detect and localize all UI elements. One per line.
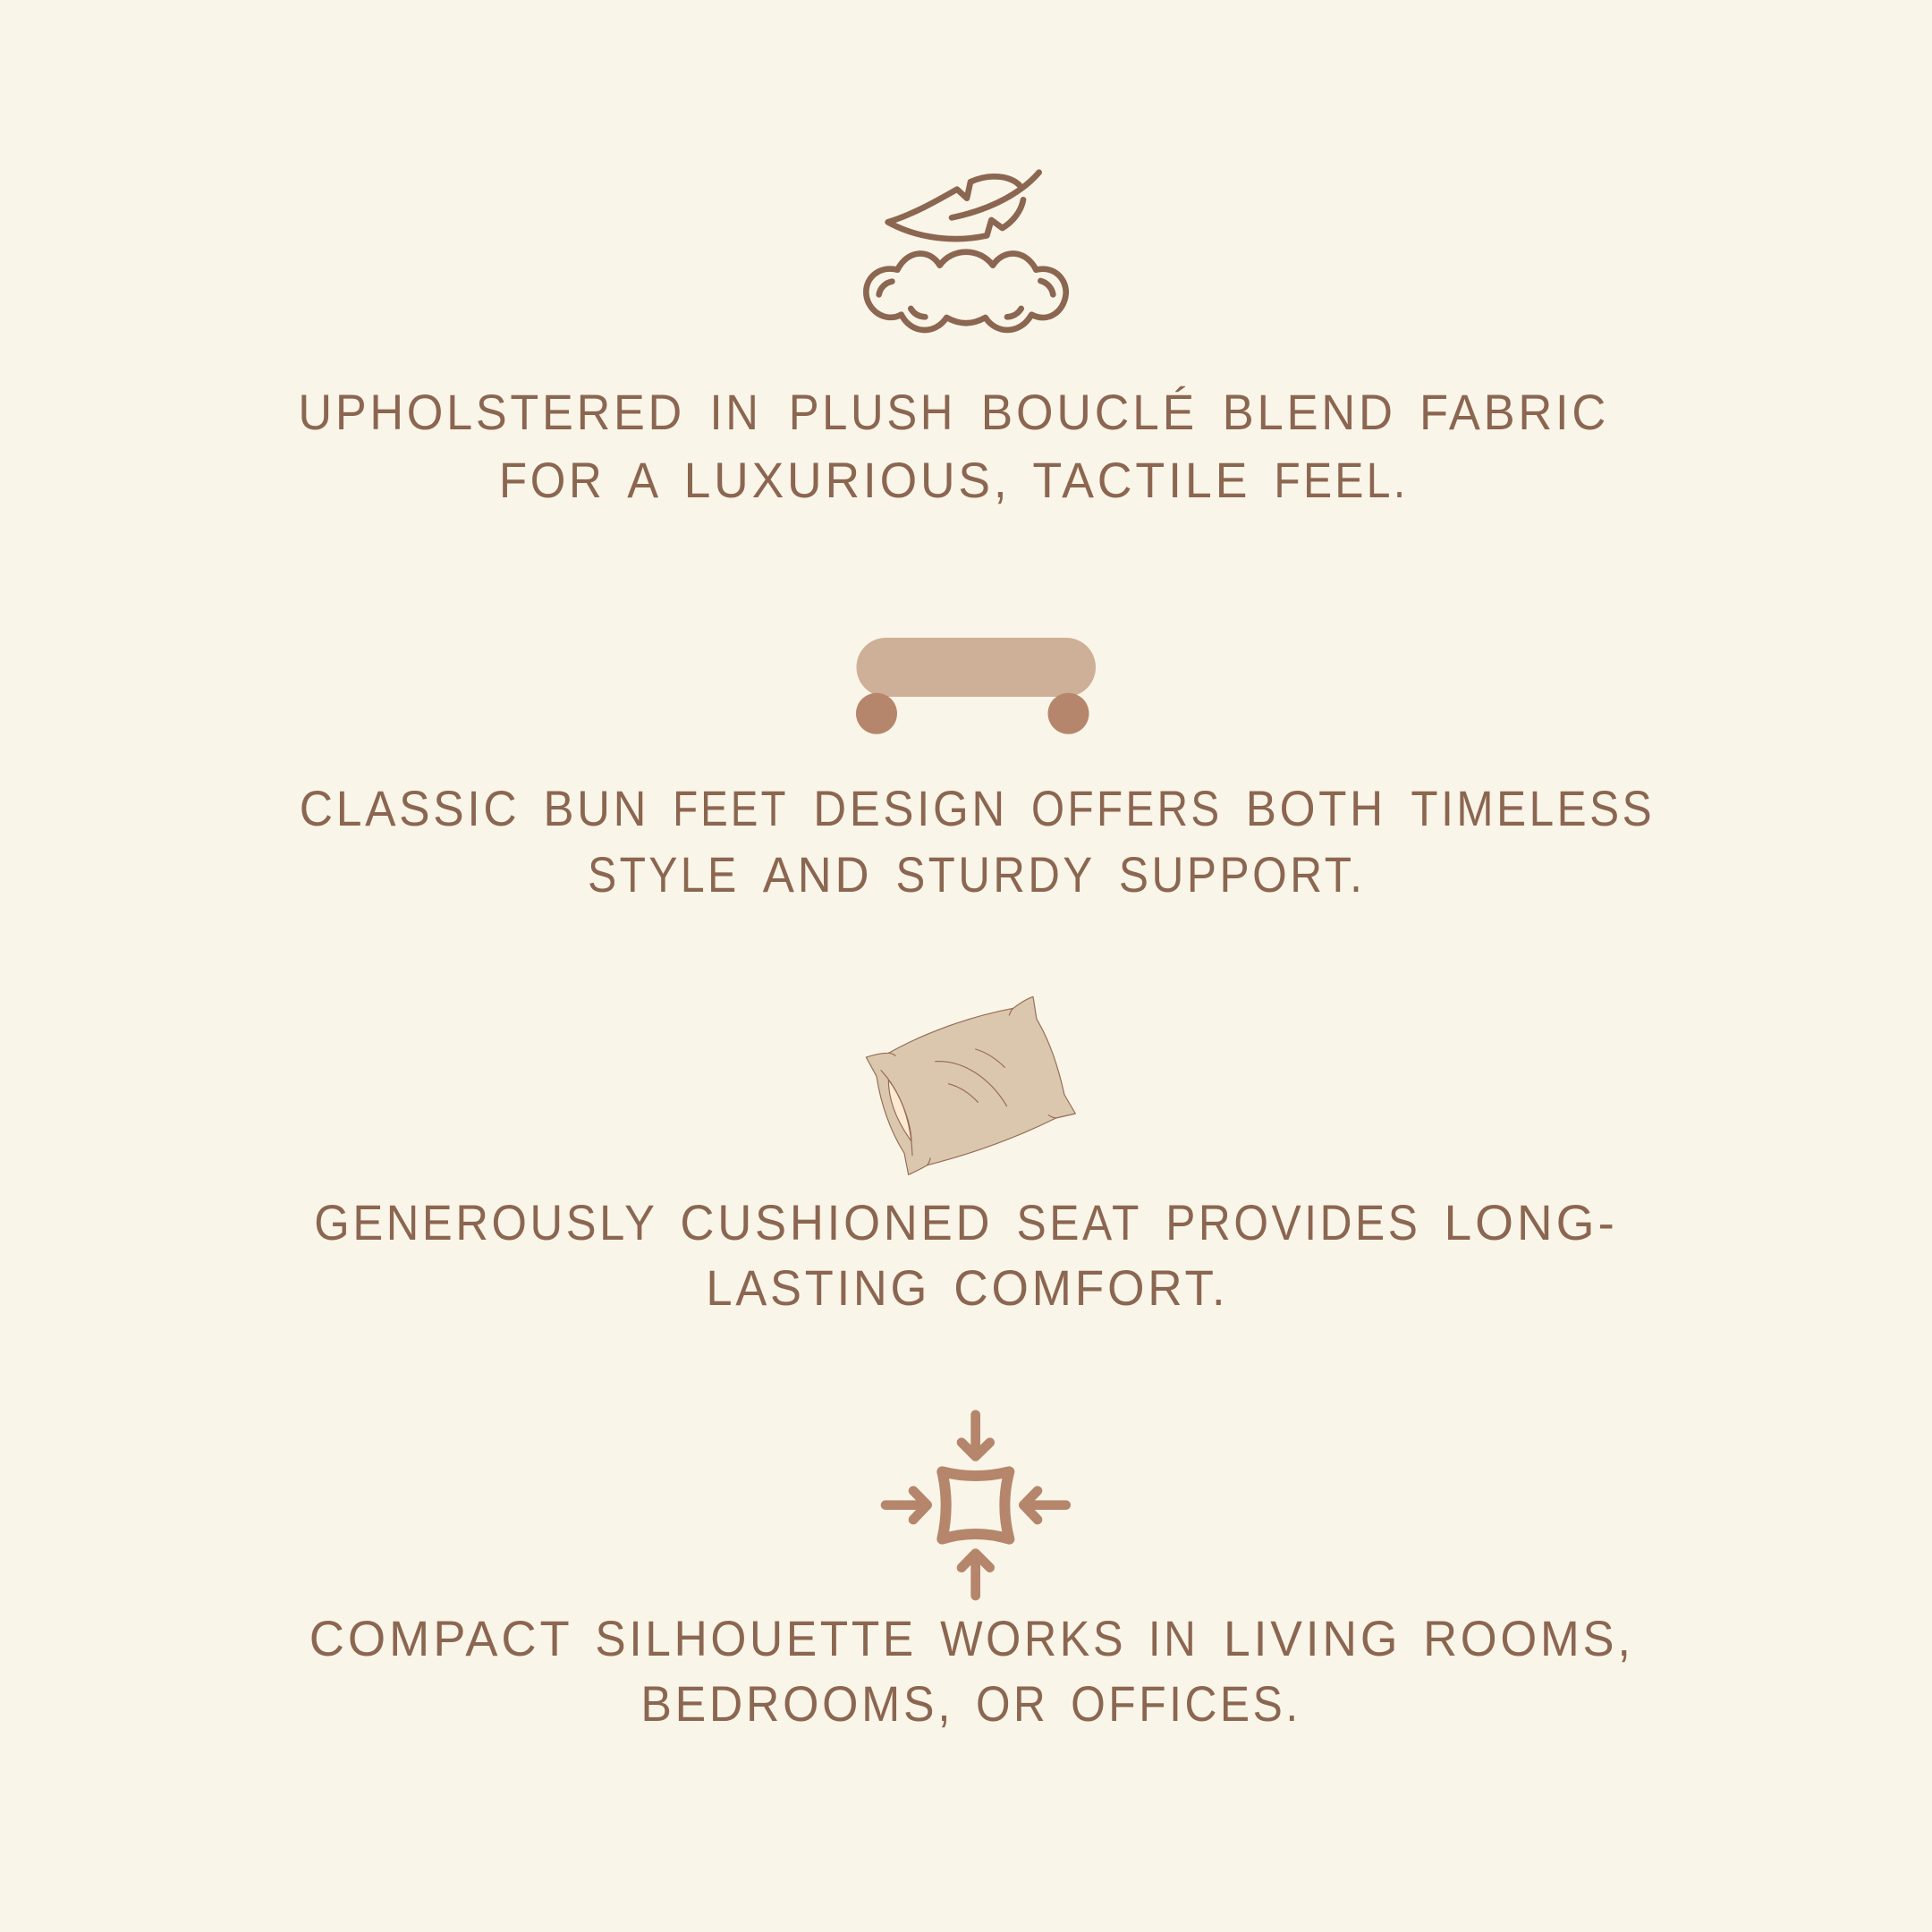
text: boucle fabric: [298, 384, 1609, 508]
text: cushioned seat: GENEROUSLY: [314, 1194, 658, 1250]
text: compact silhouette: ROOMS,: [1423, 1610, 1634, 1666]
icon: feather above cloud: [866, 173, 1066, 330]
text: boucle fabric: BLEND: [1223, 384, 1396, 440]
text: boucle fabric: IN: [710, 384, 762, 440]
text: bun feet: SUPPORT.: [1119, 846, 1365, 902]
icon: pillow: [866, 996, 1075, 1174]
text: bun feet: BOTH: [1246, 780, 1386, 836]
text: cushioned seat: LASTING: [706, 1259, 930, 1316]
text: compact silhouette: COMPACT: [309, 1610, 573, 1666]
text: cushioned seat: COMFORT.: [953, 1259, 1229, 1316]
text: boucle fabric: PLUSH: [789, 384, 956, 440]
text: bun feet: FEET: [673, 780, 789, 836]
text: boucle fabric: LUXURIOUS,: [684, 452, 1011, 508]
text: bun feet: TIMELESS: [1411, 780, 1655, 836]
text: cushioned seat: PROVIDES: [1165, 1194, 1420, 1250]
text: bun feet: STYLE: [588, 846, 740, 902]
icon: bench with bun feet: [856, 638, 1096, 734]
text: boucle fabric: TACTILE: [1032, 452, 1250, 508]
text: compact silhouette: SILHOUETTE: [595, 1610, 917, 1666]
text: bun feet: CLASSIC: [300, 780, 520, 836]
text: boucle fabric: A: [627, 452, 662, 508]
text: boucle fabric: UPHOLSTERED: [298, 384, 685, 440]
text: compact silhouette: IN: [1148, 1610, 1199, 1666]
text: cushioned seat: CUSHIONED: [680, 1194, 993, 1250]
text: compact silhouette: OFFICES.: [1071, 1675, 1301, 1732]
text: boucle fabric: BOUCLÉ: [981, 384, 1198, 440]
text: bun feet: BUN: [544, 780, 649, 836]
text: boucle fabric: FABRIC: [1419, 384, 1609, 440]
text: cushioned seat: SEAT: [1016, 1194, 1142, 1250]
text: bun feet: OFFERS: [1031, 780, 1223, 836]
text: compact silhouette: WORKS: [940, 1610, 1126, 1666]
text: boucle fabric: FOR: [499, 452, 605, 508]
text: compact silhouette: [309, 1610, 1634, 1732]
text: bun feet: STURDY: [896, 846, 1096, 902]
text: bun feet: AND: [763, 846, 872, 902]
text: compact silhouette: BEDROOMS,: [640, 1675, 953, 1732]
text: cushioned seat: LONG-: [1444, 1194, 1618, 1250]
text: compact silhouette: LIVING: [1224, 1610, 1401, 1666]
text: boucle fabric: FEEL.: [1274, 452, 1409, 508]
text: cushioned seat: [314, 1194, 1618, 1316]
text: bun feet: DESIGN: [813, 780, 1008, 836]
icon: compact square with inward arrows: [886, 1415, 1066, 1596]
text: compact silhouette: OR: [976, 1675, 1048, 1732]
text: bun feet: [300, 780, 1655, 902]
